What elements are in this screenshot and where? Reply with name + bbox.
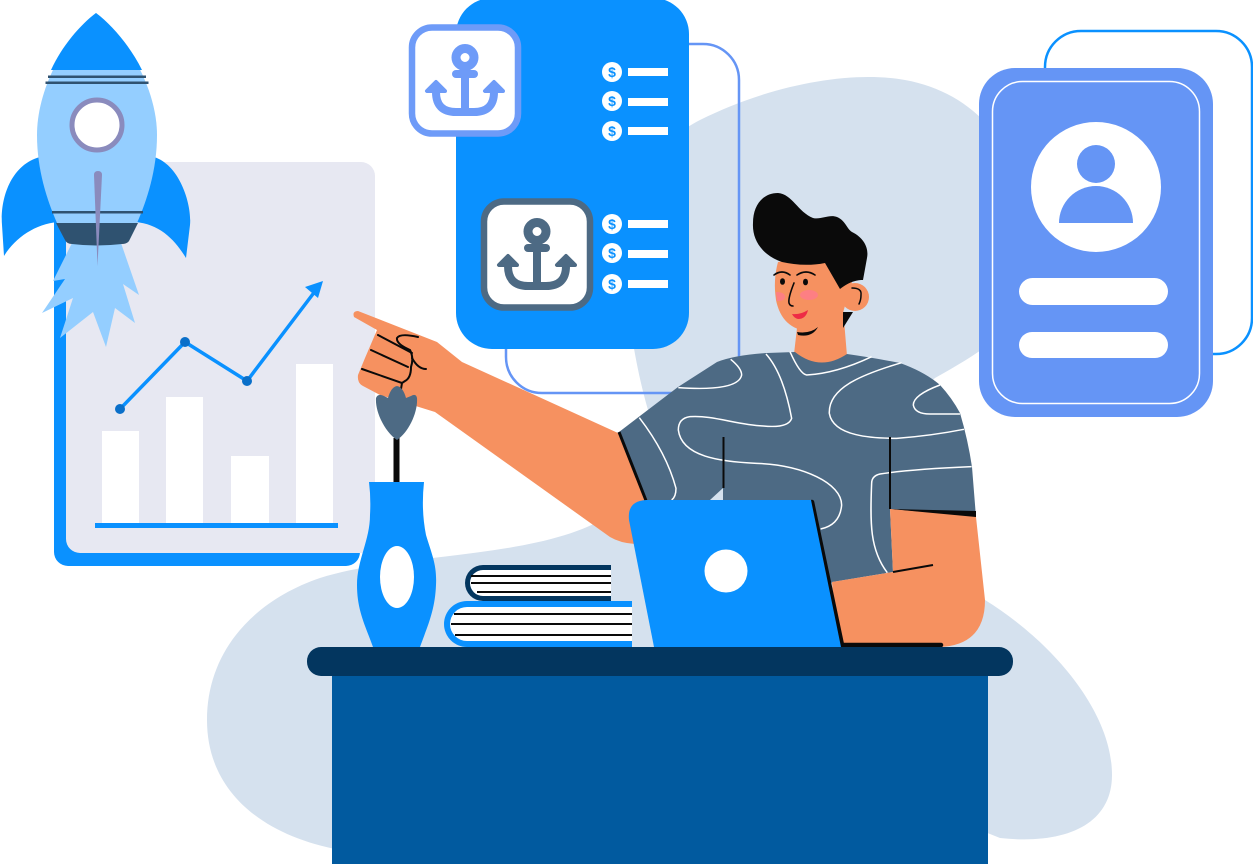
price list: bottom	[602, 214, 668, 294]
neck shadow	[843, 312, 853, 328]
rocket right fin	[135, 157, 190, 258]
price list: top	[602, 62, 668, 141]
profile text pills	[1019, 278, 1168, 358]
laptop	[629, 500, 941, 647]
line chart with arrow	[115, 281, 323, 414]
rocket porthole	[72, 100, 122, 150]
book: top	[465, 565, 611, 601]
background blob: lower	[207, 470, 1112, 864]
chin line	[797, 327, 818, 336]
rocket stripes	[46, 76, 148, 214]
background blob: upper	[627, 77, 1020, 480]
sleeve shadow	[890, 509, 976, 518]
chart board blue backing	[54, 200, 360, 566]
bar chart	[102, 364, 333, 524]
resting arm	[832, 509, 985, 647]
icon: anchor tile dark	[484, 202, 590, 308]
chart board face	[66, 162, 375, 553]
rocket nose	[51, 13, 142, 70]
face	[775, 255, 852, 331]
shirt fold lines	[724, 437, 890, 509]
pointing arm	[354, 311, 650, 544]
desk top	[307, 647, 1013, 676]
price list: top: $	[608, 123, 616, 139]
price list: bottom: $	[608, 216, 616, 232]
eyebrows	[774, 272, 815, 275]
icon: user avatar	[1031, 122, 1161, 252]
nose	[789, 283, 794, 306]
price list: bottom: $	[608, 276, 616, 292]
panel: back outline of price sheet	[506, 44, 739, 393]
profile card back outline	[1045, 31, 1252, 354]
book: bottom	[444, 601, 632, 647]
sleeve edge shadow	[619, 432, 647, 503]
desk base	[332, 670, 988, 864]
rocket left fin	[2, 157, 58, 256]
rocket flame	[42, 243, 139, 347]
desk	[307, 647, 1013, 864]
shirt pattern lines	[639, 352, 972, 573]
eyes	[780, 278, 808, 285]
icon: anchor tile light	[412, 28, 518, 134]
ear line	[852, 288, 861, 304]
hair	[753, 193, 867, 289]
price list: top: $	[608, 93, 616, 109]
icon: rocket	[2, 13, 190, 347]
vase	[357, 482, 436, 647]
cheeks	[776, 290, 818, 301]
panel: chart board	[54, 162, 375, 566]
rocket body	[37, 13, 157, 223]
elbow crease	[893, 565, 933, 572]
vase window	[380, 546, 414, 608]
laptop edge shadow	[812, 502, 941, 645]
price list: bottom: $	[608, 245, 616, 261]
gap between arm and torso	[710, 488, 723, 500]
icon: flower head	[376, 386, 417, 440]
panel: price sheet	[456, 0, 689, 349]
panel: profile card	[979, 31, 1252, 417]
price list: top: $	[608, 64, 616, 80]
profile card inner outline	[992, 82, 1200, 404]
laptop lid	[629, 500, 841, 647]
neck	[794, 308, 847, 365]
hand finger lines	[362, 335, 426, 389]
character: presenter	[354, 193, 985, 647]
flower stem	[394, 438, 400, 484]
ear	[841, 283, 869, 311]
chart baseline	[95, 523, 338, 528]
profile card front	[979, 68, 1213, 417]
shirt torso	[619, 352, 976, 640]
laptop logo	[704, 550, 748, 592]
rocket exhaust band	[56, 223, 138, 246]
mouth	[792, 310, 808, 319]
rocket center spike	[94, 171, 102, 266]
